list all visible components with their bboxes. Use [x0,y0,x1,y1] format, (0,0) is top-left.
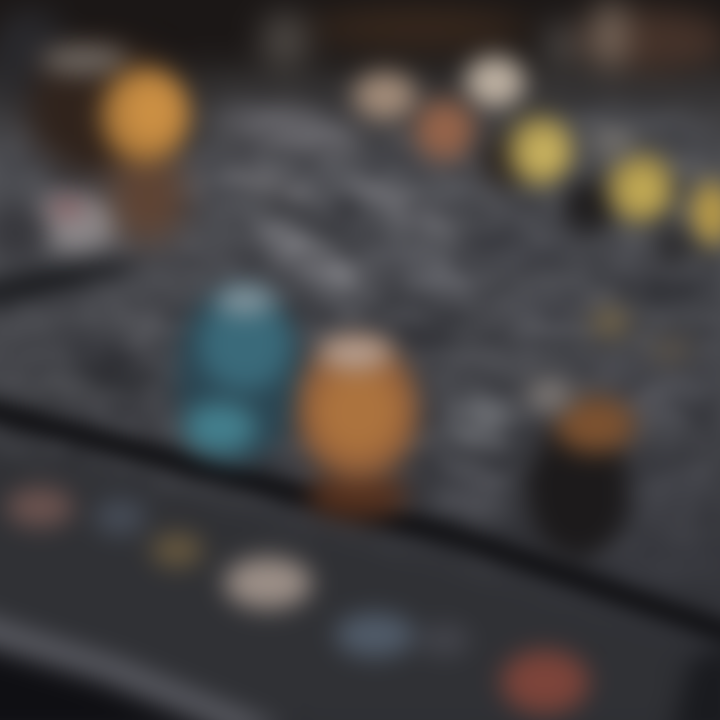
sphere: blue [176,286,300,463]
diagonal dark ledge [0,392,720,652]
row of bokeh spheres: top right [353,56,720,263]
bottom-left rail [0,612,300,720]
bottom-right dark corner [670,640,720,720]
lower board panel [0,440,720,720]
mottled board texture [51,138,713,458]
sphere: orange centre [298,337,418,519]
top dark band with warm bokeh [0,0,720,110]
sphere: orange top left [27,40,189,243]
sphere: dark brown right [526,380,635,558]
left dish [0,185,130,318]
small amber spots [590,307,692,363]
lower board spots [6,487,589,714]
grey board patches [5,98,720,586]
